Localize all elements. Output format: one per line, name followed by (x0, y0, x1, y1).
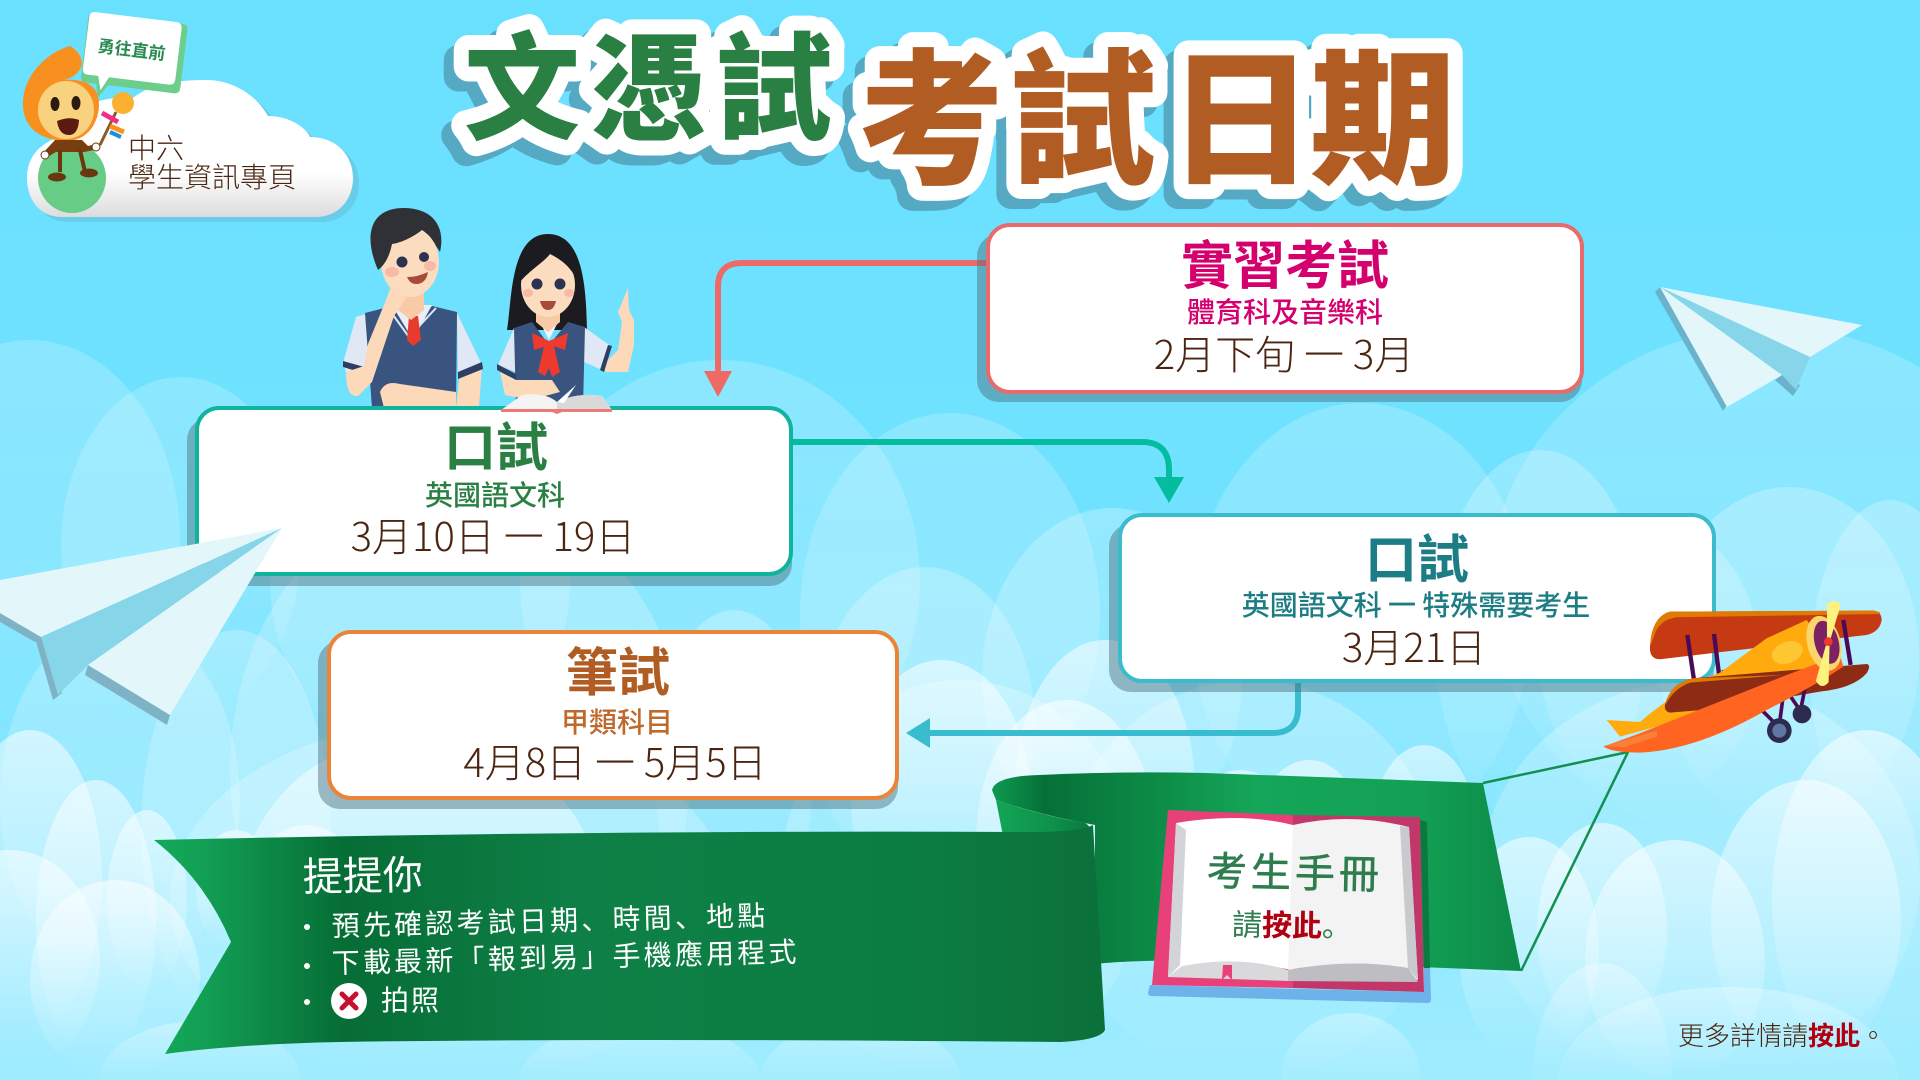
logo text: 學生資訊專頁 (128, 156, 296, 196)
speech bubble (79, 11, 188, 108)
title: 文憑試 考試日期: 考試日期 (848, 50, 1446, 213)
reminder list: 預先確認考試日期、時間、地點 (331, 894, 769, 945)
panel: 實習考試: 實習考試 (1181, 238, 1389, 296)
panel: 口試 英國語文科: 3月10日 一 19日 (351, 505, 635, 563)
logo text (128, 127, 296, 196)
panel: 口試 英國語文科: 口試 (444, 420, 548, 478)
logo text: 中六 (128, 127, 184, 167)
panel: 筆試 (318, 632, 898, 809)
panel: 筆試: 筆試 (566, 645, 670, 703)
title: 文憑試 考試日期: 考試日期 (858, 40, 1456, 203)
more details link: 更多詳情請按此。 (1678, 1016, 1886, 1053)
panel: 口試 英國語文科 (187, 408, 792, 586)
candidate handbook: 考生手冊 (1206, 850, 1383, 898)
icon: no camera cross (331, 983, 367, 1019)
title: 文憑試 考試日期 (454, 25, 1456, 213)
mascot (23, 46, 134, 182)
green oval (38, 143, 106, 213)
candidate handbook: 請按此。 (1232, 900, 1352, 946)
students (343, 208, 634, 408)
panel: 實習考試 (977, 225, 1582, 402)
panel: 筆試: 甲類科目 (561, 701, 673, 741)
panel: 口試 特殊需要考生: 口試 (1365, 532, 1469, 590)
paper plane right (1655, 287, 1862, 411)
front banner (154, 825, 1105, 1054)
back banner (992, 772, 1521, 971)
heading: 提提你: 提提你 (302, 854, 423, 900)
boy (343, 208, 483, 408)
title: 文憑試 考試日期: 文憑試 (464, 25, 832, 155)
title: 文憑試 考試日期: 文憑試 (454, 35, 822, 165)
title: 文憑試 考試日期: 文憑試 (464, 25, 832, 155)
paper plane left (0, 528, 282, 725)
connector: teal arrow (792, 442, 1184, 503)
panel: 口試 特殊需要考生: 英國語文科 一 特殊需要考生 (1242, 584, 1590, 624)
connector: blue arrow (906, 682, 1298, 748)
logo cloud (27, 80, 359, 222)
panel: 口試 特殊需要考生 (1109, 515, 1714, 692)
panel: 實習考試: 2月下旬 一 3月 (1154, 323, 1414, 381)
connector: red arrow (704, 263, 987, 397)
panel: 筆試: 4月8日 一 5月5日 (463, 731, 767, 789)
panel: 口試 特殊需要考生: 3月21日 (1342, 616, 1486, 674)
reminder list (304, 894, 800, 1019)
candidate handbook (1148, 810, 1431, 1003)
open book on panel (501, 385, 612, 414)
strings to airplane (1483, 752, 1628, 971)
airplane (1603, 602, 1882, 753)
girl (497, 234, 634, 408)
panel: 口試 英國語文科: 英國語文科 (425, 474, 565, 514)
panel: 實習考試: 體育科及音樂科 (1187, 291, 1383, 331)
speech bubble: 勇往直前 (97, 36, 167, 64)
title: 文憑試 考試日期: 考試日期 (858, 40, 1456, 203)
reminder list: 拍照 (381, 985, 441, 1016)
reminder list: 下載最新「報到易」手機應用程式 (331, 937, 800, 979)
